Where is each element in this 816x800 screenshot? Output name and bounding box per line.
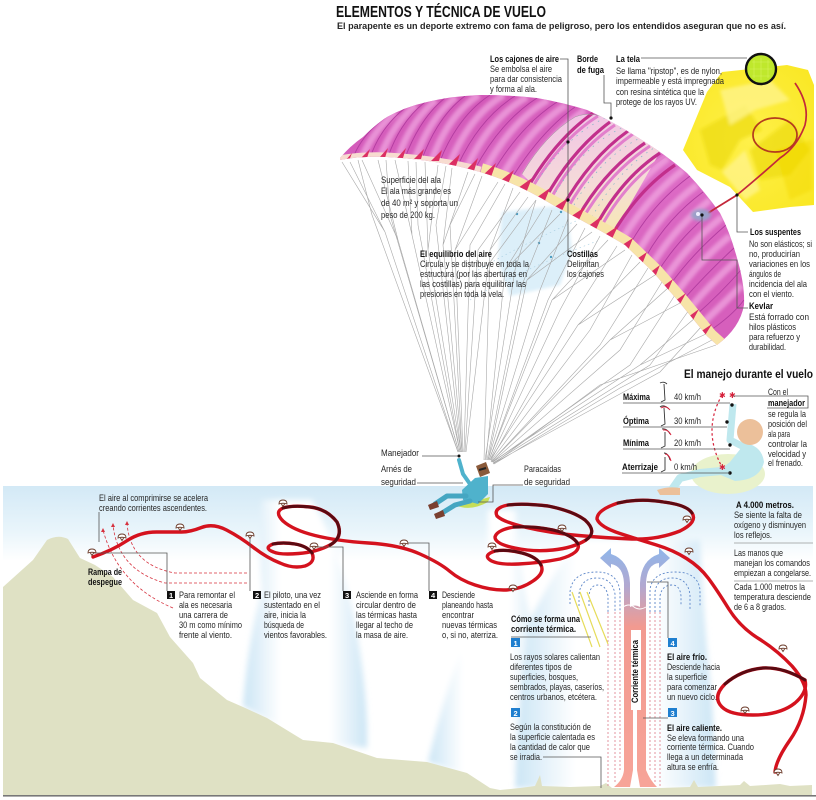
step 4: o, si no, aterriza. [442,629,498,640]
label: los suspentes: no, producirían [749,248,800,259]
thermal column: second [243,500,367,748]
seated pilot diagram: ✱ [719,463,726,472]
label: superficie del ala: Superficie del ala [381,174,442,185]
speed table: Aterrizaje [622,461,658,472]
text: como se forma: diferentes tipos de [510,661,572,672]
text: aire comprimido [99,492,209,513]
text: el aire caliente [643,708,754,772]
step 1: 30 m como mínimo [179,619,242,630]
speed table: 0 km/h [674,461,697,472]
label: kevlar: Está forrado con [749,311,809,322]
label: costillas [567,248,604,279]
label: manejador [381,447,460,458]
step 2: aire, inicia la [264,609,307,620]
red cord [708,83,806,213]
speed table: Mínima [623,437,650,448]
label: el equilibrio del aire: las costillas) para equilibrar las [420,278,526,289]
gliders along the path [88,500,787,776]
icon: ripstop fabric circle [746,54,776,84]
background sky band [3,486,813,748]
label: arnés de seguridad [381,463,463,487]
text: aire comprimido: El aire al comprimirse se acelera [99,492,209,503]
cream leading edge [480,174,717,347]
speed table: 30 km/h [674,415,701,426]
text: como se forma: la superficie calentada es [510,731,595,742]
label: paracaídas de seguridad [478,463,570,502]
label: el equilibrio del aire: presiones en toda la vela. [420,288,504,299]
text: a 4.000 metros: los reflejos. [734,529,772,540]
step 2: El piloto, una vez [264,589,321,600]
step 2: vientos favorables. [264,629,327,640]
step 1: Para remontar el [179,589,235,600]
step 2: 2 [255,591,259,600]
step 1: una carrera de [179,609,228,620]
text: como se forma [510,613,604,788]
step 4: nuevas térmicas [442,619,497,630]
text: como se forma: centros urbanos, etcétera. [510,691,597,702]
label: costillas: los cajones [567,268,604,279]
label: el equilibrio del aire [420,248,530,299]
label: los cajones de aire: Los cajones de aire [490,53,559,64]
label: kevlar: hilos plásticos [749,321,796,332]
text: con el manejador [733,386,808,468]
text: como se forma: se irradia. [510,751,542,762]
text: con el manejador: controlar la [768,438,808,449]
fabric swatch: yellow cloth [683,65,814,213]
text: a 4.000 metros: Las manos que [734,547,783,558]
flight path [93,500,806,772]
text: el aire frio: un nuevo ciclo. [667,691,717,702]
label: los suspentes: ángulos de [749,268,781,279]
label: rampa de despegue: Rampa de [88,566,122,577]
label: superficie del ala: peso de 200 kg. [381,209,435,220]
text: aire comprimido: creando corrientes ascendentes. [99,502,207,513]
speed table: 40 km/h [674,391,701,402]
text: a 4.000 metros [734,499,813,612]
connectors for steps [93,512,429,591]
dashed circulation loops [570,572,700,787]
step 1: 1 [169,591,173,600]
text: el aire frio: la superficie [667,671,707,682]
speed table [622,382,730,473]
speed table: Máxima [623,391,651,402]
label: kevlar: Kevlar [749,300,773,311]
step 1: ala es necesaria [179,599,233,610]
thermal columns: right side [428,510,716,788]
label: paracaídas de seguridad: de seguridad [524,476,570,487]
label: el equilibrio del aire: El equilibrio del aire [420,248,492,259]
text: el aire caliente: Se eleva formando una [667,732,745,743]
text: como se forma: Cómo se forma una [511,613,581,624]
label: la tela: con resina sintética que la [616,86,705,97]
label: los suspentes [735,193,812,299]
label: rampa de despegue: despegue [88,576,122,587]
label: la tela: Se llama "ripstop", es de nylon, [616,65,722,76]
label: los cajones de aire [490,53,570,252]
step 4: planeando hasta [442,599,494,610]
label: la tela [616,53,747,107]
text: con el manejador: ala para [768,428,791,439]
step 4: 4 [431,591,436,600]
wind arrows: dashed red air currents [101,521,247,608]
step 2 [253,589,327,640]
label: los cajones de aire: Se embolsa el aire [490,63,552,74]
title: ELEMENTOS Y TÉCNICA DE VUELO [336,4,546,21]
sun rays [572,592,608,647]
step 4: Desciende [442,589,475,600]
text: el aire caliente: El aire caliente. [667,722,722,733]
label: kevlar: durabilidad. [749,341,786,352]
label: borde de fuga: Borde [577,53,598,64]
step 1: frente al viento. [179,629,232,640]
text: como se forma: sembrados, playas, caseríos, [510,681,604,692]
step 3: Asciende en forma [356,589,419,600]
seated pilot diagram: ✱ [719,391,726,400]
air circulation area [470,205,600,300]
text: el aire frio: Desciende hacia [667,661,721,672]
text: como se forma: superficies, bosques, [510,671,578,682]
label: arnés de seguridad: Arnés de [381,463,412,474]
label: superficie del ala [381,174,458,220]
label: kevlar [700,213,809,352]
mountain and ground [3,537,816,797]
label: arnés de seguridad: seguridad [381,476,416,487]
label: superficie del ala: de 40 m² y soporta un [381,197,458,208]
label: los suspentes: Los suspentes [750,226,801,237]
paraglider wing [340,95,744,347]
step 3: la masa de aire. [356,629,408,640]
text: a 4.000 metros: de 6 a 8 grados. [734,601,786,612]
text: el aire frio: para comenzar [667,681,717,692]
text: con el manejador: se regula la [768,408,807,419]
text: el aire caliente: altura se enfría. [667,761,719,772]
text: como se forma: 1 [514,639,518,648]
label: costillas: Delimitan [567,258,599,269]
step 3: las térmicas hasta [356,609,418,620]
label: el equilibrio del aire: Circula y se distribuye en toda la [420,258,530,269]
label: borde de fuga: de fuga [577,64,605,75]
step 2: búsqueda de [264,619,304,630]
text: a 4.000 metros: A 4.000 metros. [736,499,794,510]
label: kevlar: para refuerzo y [749,331,800,342]
text: como se forma: 2 [514,709,518,718]
step 3: 3 [345,591,349,600]
speed table: Óptima [623,415,650,426]
text: el aire frio: 4 [670,639,676,648]
label: la tela: protege de los rayos UV. [616,96,697,107]
step 3: llegar al techo de [356,619,413,630]
step 2: sustentado en el [264,599,320,610]
speed table: 20 km/h [674,437,701,448]
step 3 [343,589,419,640]
text: con el manejador: Con el [768,386,788,397]
label: la tela: La tela [616,53,641,64]
step 3: circular dentro de [356,599,416,610]
text: como se forma: corriente térmica. [511,623,576,634]
subtitle: El parapente es un deporte extremo con fama de peligroso, pero los entendidos aseguran que no es así. [337,21,786,32]
text: a 4.000 metros: Se siente la falta de [734,509,802,520]
text: el aire caliente: corriente térmica. Cuando [667,741,754,752]
step 1 [167,589,242,640]
label: borde de fuga [577,53,613,120]
label: paracaídas de seguridad: Paracaídas [524,463,561,474]
step 4: encontrar [442,609,474,620]
step 4 [429,589,498,640]
text: con el manejador: velocidad y [768,448,806,459]
suspension lines [342,160,716,464]
label: los cajones de aire: y forma al ala. [490,83,537,94]
text: con el manejador: el frenado. [768,457,803,468]
text: como se forma: Según la constitución de [510,721,591,732]
text: como se forma: la cantidad de calor que [510,741,590,752]
label: la tela: impermeable y está impregnada [616,75,725,86]
text: el aire frio [647,582,721,702]
label: costillas: Costillas [567,248,598,259]
text: el aire caliente: llega a un determinada [667,751,744,762]
label: rampa de despegue [88,566,122,587]
label: los suspentes: con el viento. [749,288,794,299]
label: corriente térmica: Corriente térmica [629,639,640,703]
pilot figure under wing [428,460,490,519]
label: manejador: Manejador [381,447,419,458]
text: el aire caliente: 3 [670,709,675,718]
label: el equilibrio del aire: estructura (por las aberturas en [420,268,527,279]
seated pilot diagram: ✱ [729,391,736,400]
text: como se forma: Los rayos solares calientan [510,651,600,662]
label: los cajones de aire: para dar consistencia [490,73,563,84]
text: con el manejador: manejador [768,397,805,408]
text: el aire frio: El aire frío. [667,651,707,662]
icon: kevlar line detail [691,209,711,221]
label: superficie del ala: El ala más grande es [381,185,451,196]
thermal current diagram [600,548,670,787]
seated pilot diagram [657,391,765,495]
